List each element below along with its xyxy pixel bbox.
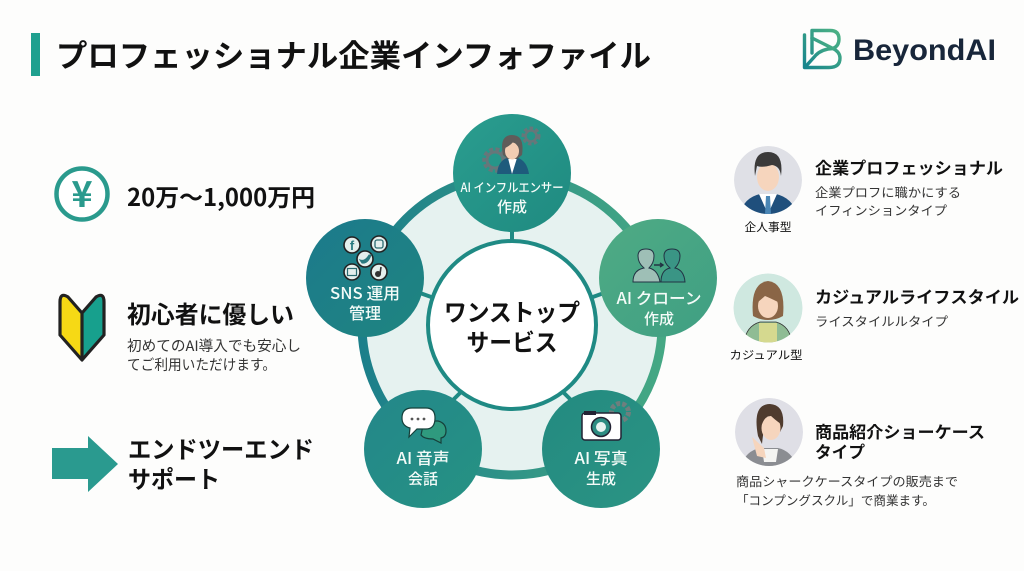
- center circle: ワンストップ: [444, 300, 580, 327]
- avatar: casual woman: [734, 274, 802, 343]
- beginner description: てご利用いただけます。: [127, 357, 276, 374]
- node: AI influencer: 作成: [497, 196, 527, 217]
- support text: サポート: [128, 467, 220, 494]
- spokes: [420, 230, 604, 401]
- node: AI photo: AI 写真: [574, 445, 628, 469]
- panel: one-stop service diagram: [306, 114, 717, 508]
- heading: 商品紹介ショーケース: [815, 422, 985, 442]
- node: AI clone: [599, 219, 717, 337]
- description: [815, 185, 961, 218]
- icon: arrow: [52, 436, 118, 492]
- description: イフィンションタイプ: [815, 204, 948, 218]
- price text: 20万～1,000万円: [127, 178, 315, 213]
- beginner description: [127, 335, 301, 374]
- description: ライスタイルルタイプ: [815, 315, 949, 329]
- beginner heading: 初心者に優しい: [127, 302, 294, 329]
- avatar caption: カジュアル型: [730, 348, 802, 362]
- node: AI clone: AI クローン: [616, 285, 702, 309]
- icon: chat bubbles: [402, 408, 446, 443]
- support text: [128, 437, 314, 494]
- node: SNS management: [306, 219, 424, 337]
- avatar caption: 企人事型: [744, 220, 792, 234]
- title accent bar: [31, 33, 40, 76]
- center circle: [428, 241, 596, 409]
- icon: yen coin: ¥: [71, 166, 93, 218]
- node: SNS management: 管理: [349, 300, 381, 324]
- node: AI photo: 生成: [586, 468, 616, 489]
- node: AI influencer: [453, 114, 571, 232]
- panel: beginner friendly: [60, 295, 301, 374]
- panel: corporate professional: [734, 146, 1003, 234]
- node: AI clone: 作成: [644, 308, 674, 329]
- node: AI voice: AI 音声: [396, 445, 450, 469]
- icon: camera with gear: [582, 404, 628, 440]
- heading: タイプ: [815, 443, 866, 462]
- node: AI voice: [364, 390, 482, 508]
- heading: [815, 422, 985, 462]
- icon: logo mark: [804, 30, 840, 68]
- heading: 企業プロフェッショナル: [815, 158, 1003, 178]
- logo wordmark: BeyondAI: [853, 34, 996, 67]
- beginner description: 初めてのAI導入でも安心し: [127, 335, 301, 356]
- description: 「コンプングスクル」で商業ます。: [736, 493, 935, 508]
- node: AI photo: [542, 390, 660, 508]
- description: [736, 474, 958, 508]
- description: 企業プロフに職かにする: [815, 185, 961, 200]
- icon: woman with gears: [484, 128, 539, 174]
- avatar: businessman: [734, 146, 802, 215]
- panel: casual lifestyle: [730, 274, 1019, 362]
- description: 商品シャークケースタイプの販売まで: [736, 474, 958, 489]
- panel: product showcase: [735, 398, 985, 508]
- icon: clone people: [633, 249, 685, 282]
- heading: カジュアルライフスタイル: [815, 288, 1019, 307]
- node: AI voice: 会話: [408, 468, 438, 489]
- ring: [362, 175, 662, 475]
- node: AI influencer: AI インフルエンサー: [460, 177, 564, 196]
- panel: end to end support: [52, 436, 314, 494]
- title: プロフェッショナル企業インフォファイル: [56, 39, 651, 74]
- icon: social media: f: [350, 238, 355, 253]
- logo: BeyondAI: [804, 30, 996, 68]
- node: SNS management: SNS 運用: [330, 280, 400, 304]
- icon: beginner mark: [60, 295, 104, 360]
- support text: エンドツーエンド: [128, 437, 314, 464]
- icon: yen coin: [56, 166, 108, 220]
- avatar: showcase woman: [735, 398, 803, 467]
- panel: price: [56, 166, 315, 220]
- center circle: サービス: [466, 330, 558, 357]
